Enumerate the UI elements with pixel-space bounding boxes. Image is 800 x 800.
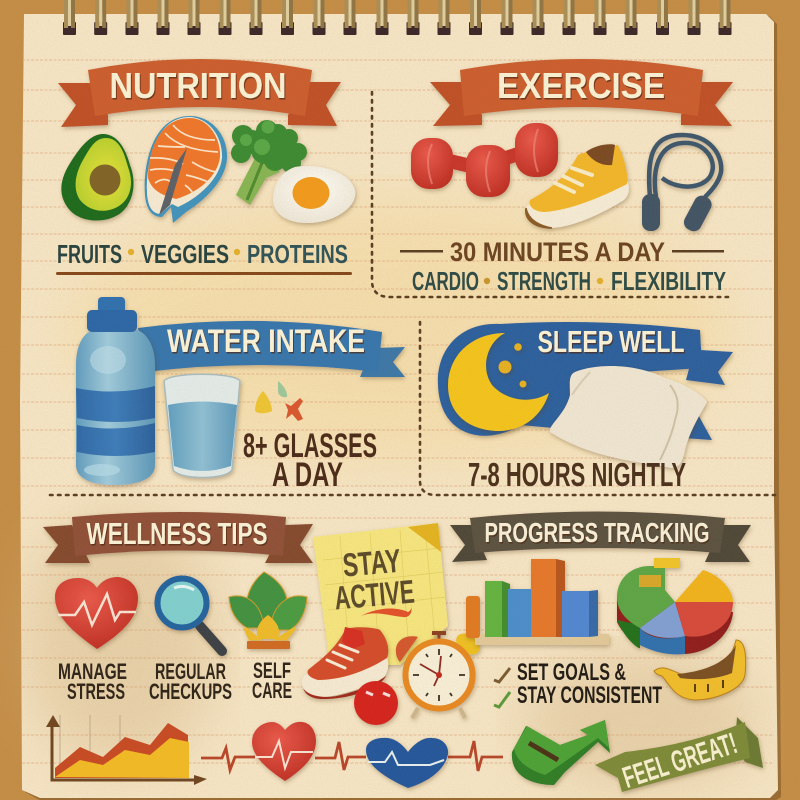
banner: exercise: EXERCISE: [497, 65, 665, 106]
labels: wellness tips: CARE: [252, 678, 292, 703]
caption: 8+ glasses: A DAY: [272, 456, 343, 494]
caption: nutrition: VEGGIES: [141, 239, 229, 269]
caption: exercise types: FLEXIBILITY: [611, 266, 726, 296]
banner: wellness tips: WELLNESS TIPS: [86, 516, 268, 551]
icon: measuring tape: [654, 640, 746, 700]
icon: alarm clock: [396, 629, 484, 718]
icon: green check arrow: [512, 720, 610, 785]
banner: progress tracking: PROGRESS TRACKING: [484, 517, 710, 548]
icon: confetti shapes: [255, 381, 303, 421]
icon: salmon steak: [145, 116, 227, 223]
icon: heart with pulse: [55, 577, 138, 649]
icon: broccoli: [231, 120, 307, 205]
sticky note: stay active: [313, 523, 448, 665]
chart: area trend: [46, 715, 207, 785]
icon: yellow sneaker: [526, 144, 629, 228]
caption: sleep hours: 7-8 HOURS NIGHTLY: [468, 456, 686, 493]
caption: nutrition: [56, 239, 352, 275]
banner: sleep well: SLEEP WELL: [538, 324, 684, 359]
icon: glass of water: [164, 374, 240, 478]
chart: 3d pie chart: [617, 558, 733, 654]
checklist: set goals: STAY CONSISTENT: [517, 682, 662, 709]
icon: magnifying glass: [158, 578, 222, 651]
labels: wellness tips: STRESS: [67, 679, 125, 704]
caption: 30 minutes a day: 30 MINUTES A DAY: [450, 237, 665, 267]
dotted dividers: [50, 92, 775, 495]
panel: water intake: [76, 297, 405, 494]
caption: nutrition: FRUITS: [57, 239, 122, 269]
sticky note: stay active: ACTIVE: [333, 573, 416, 616]
icon: crescent moon: [448, 333, 549, 431]
icon: leaves self care: [229, 572, 307, 649]
icon: fried egg: [273, 166, 355, 223]
caption: exercise types: CARDIO: [412, 266, 479, 296]
caption: 8+ glasses: 8+ GLASSES: [243, 427, 377, 465]
icon: jump rope: [642, 135, 721, 234]
panel: exercise: [400, 59, 733, 296]
panel: sleep well: [438, 322, 733, 493]
icon: red sneaker: [302, 627, 388, 699]
panel: progress tracking: [450, 512, 751, 709]
banner: wellness tips: [43, 512, 313, 563]
caption: nutrition: PROTEINS: [247, 239, 348, 269]
sticky note: stay active: STAY: [341, 542, 402, 584]
spiral binding: [63, 0, 732, 35]
icon: dumbbells: [411, 123, 558, 197]
banner: water intake: WATER INTAKE: [167, 323, 365, 359]
icon: water bottle: [76, 297, 155, 485]
icon: blue heart: [366, 738, 448, 788]
labels: wellness tips: CHECKUPS: [149, 679, 232, 704]
banner: nutrition: [58, 59, 341, 127]
labels: wellness tips: [58, 658, 292, 704]
panel: nutrition: [56, 59, 355, 275]
banner: nutrition: NUTRITION: [110, 65, 286, 106]
banner: progress tracking: [450, 512, 751, 562]
checklist: set goals: SET GOALS &: [517, 659, 626, 686]
icon: red heart: [252, 722, 316, 781]
chart: 3d bar chart: [466, 559, 609, 645]
labels: wellness tips: MANAGE: [58, 659, 127, 684]
icon: avocado: [61, 134, 134, 221]
banner: feel great: [595, 717, 763, 795]
pulse line: [201, 741, 503, 771]
labels: wellness tips: REGULAR: [155, 659, 226, 684]
banner: water intake: [138, 321, 405, 377]
panel: wellness tips: [43, 512, 313, 704]
checklist: set goals: [494, 659, 662, 709]
caption: exercise types: [412, 266, 726, 296]
icon: pillow: [550, 366, 707, 468]
icon: red ball: [354, 681, 398, 725]
caption: 8+ glasses: [243, 427, 377, 494]
caption: exercise types: STRENGTH: [497, 266, 591, 296]
banner: sleep well: [438, 322, 733, 440]
banner: exercise: [430, 59, 733, 126]
labels: wellness tips: SELF: [253, 658, 291, 683]
